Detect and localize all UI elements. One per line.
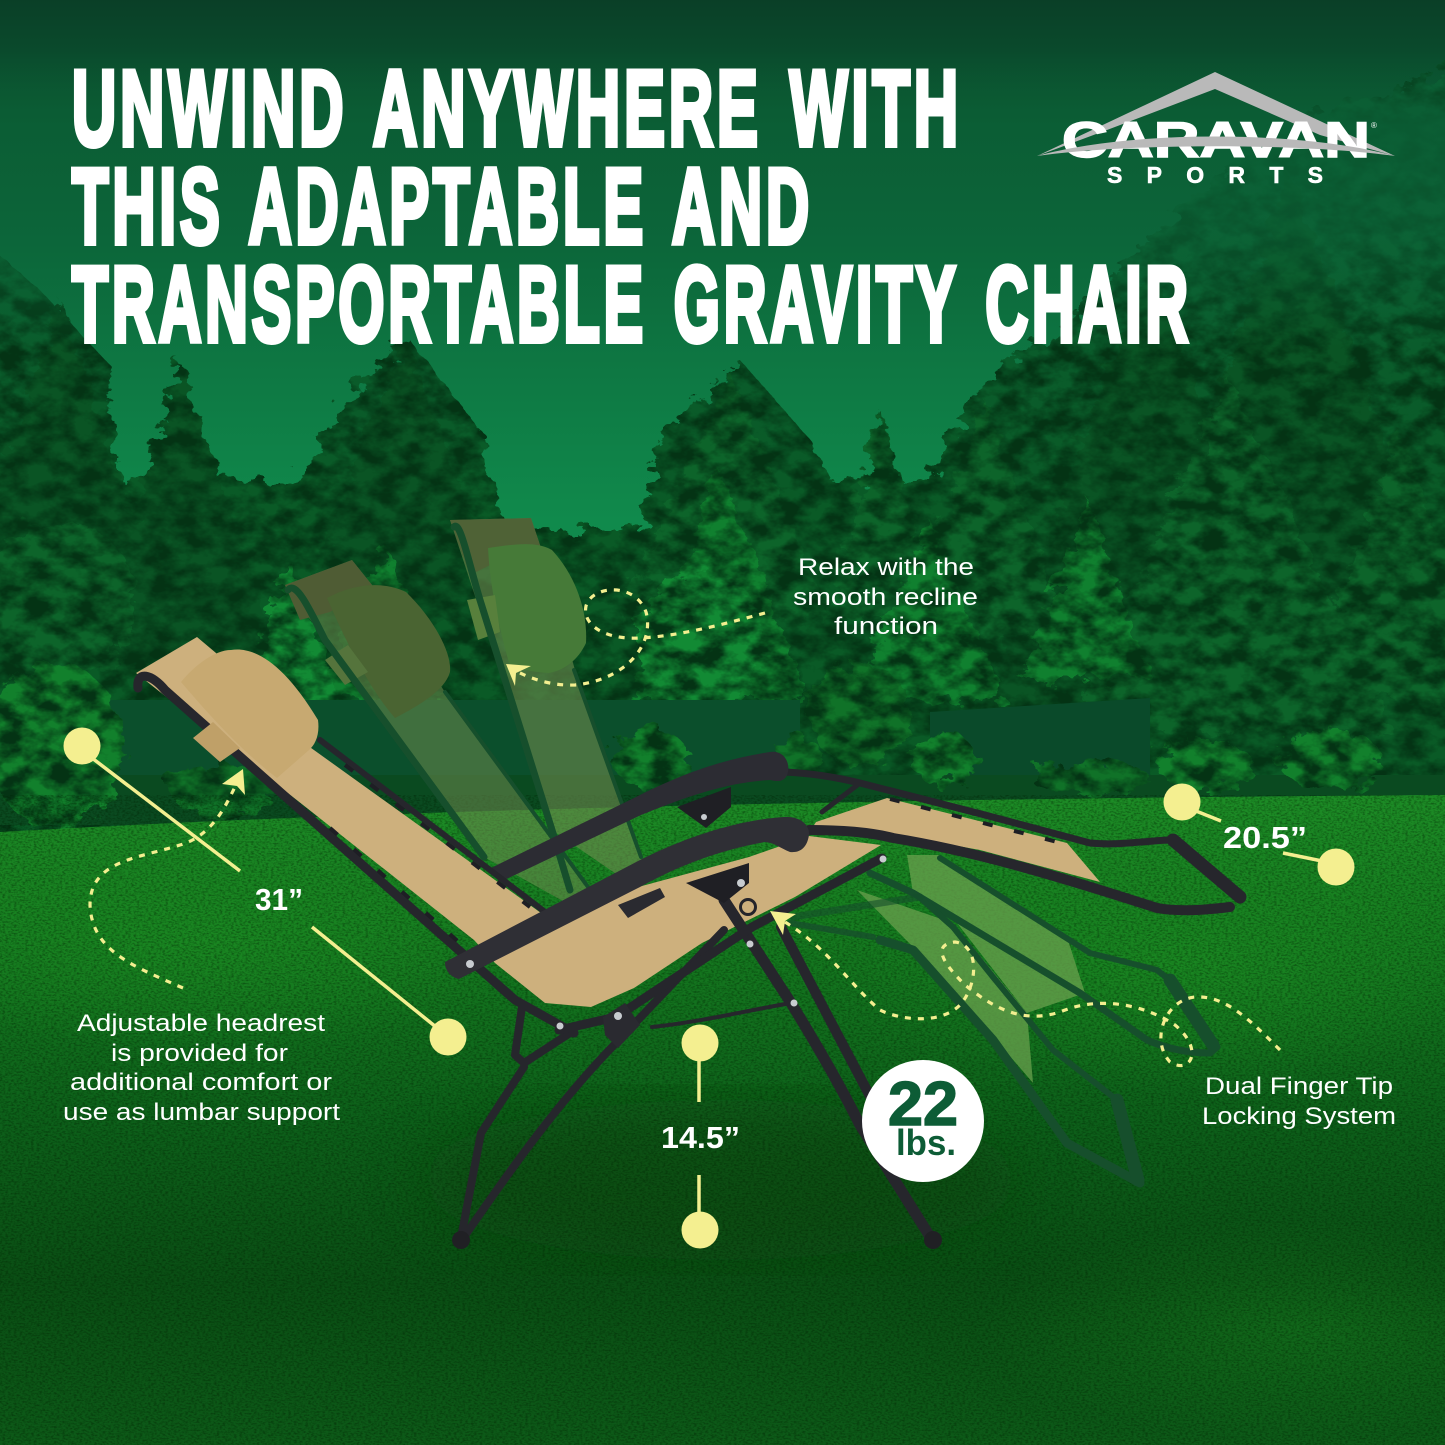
callout: adjustable headrest: Adjustable headrest (77, 1010, 325, 1037)
callout: smooth recline: Relax with the (798, 554, 974, 581)
dimension: 14.5 inch seat height: 14.5” (661, 1120, 740, 1155)
chair far arm and rear rail (491, 752, 1173, 882)
logo registered mark: ® (1371, 121, 1377, 130)
title: THIS ADAPTABLE AND (72, 146, 813, 266)
chair near armrest (445, 814, 886, 1030)
dimension: 20.5 inch width: 20.5” (1223, 820, 1307, 855)
background: lawn (0, 795, 1445, 1445)
badge: 22 lbs weight: 22 (888, 1070, 958, 1139)
background: forest treeline (0, 50, 1445, 850)
ghost pillow: middle (327, 585, 450, 718)
chair fabric: leg rest (809, 798, 1100, 882)
callout: smooth recline (506, 554, 978, 686)
title (72, 48, 1192, 364)
callout: finger tip locking system: Locking System (1202, 1103, 1396, 1130)
ghost fabric: rear chair (450, 518, 642, 880)
callout: adjustable headrest: additional comfort or (70, 1069, 332, 1096)
badge: 22 lbs weight: lbs. (896, 1122, 956, 1163)
pillow: headrest (181, 649, 318, 778)
fence (110, 698, 1150, 790)
ghost fabric: upper leg rest (907, 855, 1085, 1013)
callout: finger tip locking system (770, 911, 1396, 1130)
ghost chair: lower leg rest positions (790, 855, 1217, 1183)
logo swoosh (1037, 136, 1395, 156)
logo: Caravan Sports (1037, 72, 1395, 188)
ghost fabric: middle chair (285, 560, 590, 905)
ghost chair: upper recline positions (285, 518, 642, 905)
callout: smooth recline: function (834, 613, 938, 640)
badge: 22 lbs weight (862, 1060, 984, 1182)
chair frame: legs (452, 830, 1240, 1249)
chair: main reclined chair (136, 637, 1240, 1249)
callout: adjustable headrest (63, 769, 340, 1126)
callout: smooth recline: smooth recline (793, 584, 978, 611)
dimension: 31 inch back length: 31” (255, 882, 303, 917)
ghost fabric: lower leg rest (857, 890, 1033, 1083)
chair frame: back rails (138, 676, 665, 1033)
callout: adjustable headrest: is provided for (111, 1040, 288, 1067)
callout: adjustable headrest: use as lumbar support (63, 1099, 340, 1126)
ghost pillow: upper (488, 544, 586, 673)
callout: finger tip locking system: Dual Finger Tip (1205, 1073, 1393, 1100)
dimension: 20.5 inch width (1164, 784, 1354, 886)
dimension: 14.5 inch seat height (661, 1024, 740, 1248)
logo roof (1037, 72, 1395, 156)
logo wordmark: CARAVAN (1062, 112, 1370, 168)
background: green-tinted sky (0, 0, 1445, 900)
dimension: 31 inch back length (64, 728, 466, 1056)
chair fabric: back and seat (136, 637, 881, 1007)
logo subtitle: SPORTS (1107, 162, 1323, 188)
